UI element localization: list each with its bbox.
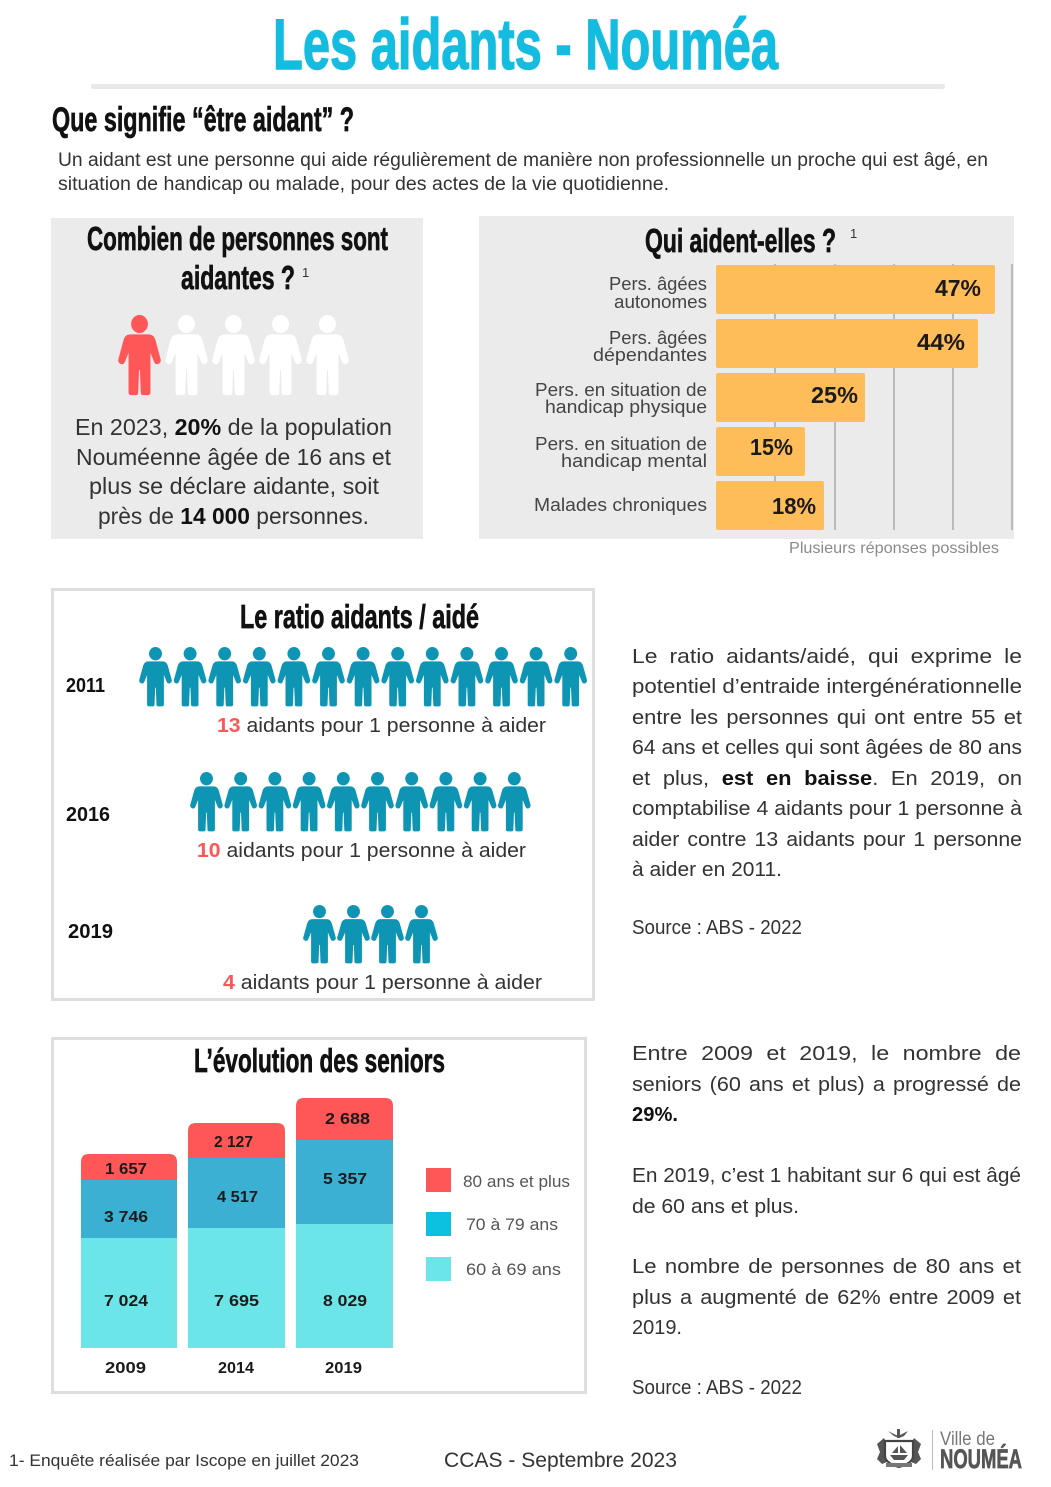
text block: definition: situation de handicap ou malade, pour des actes de la vie quotidienne. [58, 174, 669, 195]
logo: ville de Nouméa [877, 1429, 1022, 1474]
text block: ratio explanation: et plus, est en baisse . En 2019, on [632, 768, 1022, 790]
panel: qui aident-elles [479, 216, 1014, 539]
text block: seniors explanation: Le nombre de personnes de 80 ans et [632, 1256, 1021, 1278]
bar chart: who is helped: dépendantes [593, 345, 707, 365]
heading: qui aident-elles: Qui aident-elles ? [645, 222, 836, 259]
footnote: 1- Enquête réalisée par Iscope en juillet 2023 [9, 1452, 359, 1470]
text block: 20% de la population: près de 14 000 personnes. [98, 503, 369, 529]
text block: ratio explanation: aider contre 13 aidants pour 1 personne [632, 829, 1022, 851]
bar chart: who is helped: Pers. âgées [609, 274, 707, 294]
icon: crest [877, 1429, 921, 1467]
stacked bar: 2019: 2 688 [325, 1111, 370, 1128]
text block: seniors explanation: plus a augmenté de 62% entre 2009 et [632, 1287, 1021, 1309]
bar chart: who is helped: Malades chroniques [534, 495, 707, 515]
stacked bar: 2014 [188, 1123, 285, 1377]
title: Les aidants - Nouméa [273, 6, 778, 85]
text block: ratio explanation: à aider en 2011. [632, 859, 782, 881]
bar chart: who is helped: handicap physique [545, 397, 707, 417]
stacked bar: 2009 [81, 1154, 177, 1377]
stacked bar: 2009: 2009 [105, 1360, 146, 1377]
heading: combien de personnes [87, 220, 388, 296]
logo: ville de Nouméa: Ville de [940, 1429, 995, 1450]
row: 2011: 2011 [66, 675, 105, 697]
stacked bar: 2014: 2 127 [214, 1134, 253, 1151]
stacked bar: 2019: 8 029 [323, 1293, 367, 1310]
bar chart: who is helped: 47% [935, 275, 981, 301]
footer credit: CCAS - Septembre 2023 [444, 1449, 677, 1472]
stacked bar: 2014: 4 517 [217, 1189, 258, 1206]
row: 2019: 2019 [68, 921, 113, 943]
heading: combien de personnes: aidantes ? [181, 259, 295, 296]
row: 2019 [68, 905, 542, 994]
icon row: one in five people [118, 315, 349, 395]
stacked bar: 2019 [296, 1098, 393, 1377]
heading: évolution: L’évolution des seniors [194, 1042, 445, 1079]
text block: seniors explanation: 2019. [632, 1317, 682, 1339]
stacked bar: 2019: 2019 [325, 1360, 362, 1377]
text block: seniors explanation [632, 1043, 1021, 1399]
note: plusieurs réponses: Plusieurs réponses possibles [789, 540, 999, 557]
text block: definition [58, 150, 988, 195]
bar chart: who is helped: Pers. âgées [609, 328, 707, 348]
heading: combien de personnes: Combien de personnes sont [87, 220, 388, 257]
row: 2016: 10 aidants pour 1 personne à aider [197, 840, 526, 862]
bar chart: who is helped: 15% [750, 434, 793, 460]
stacked bar: 2009: 3 746 [104, 1209, 148, 1226]
row: 2011 [66, 647, 587, 737]
text block: ratio explanation: comptabilise 4 aidants pour 1 personne à [632, 798, 1023, 820]
bar chart: who is helped [534, 265, 995, 530]
text block: 20% de la population: Nouméenne âgée de 16 ans et [76, 444, 392, 470]
legend: 60 à 69 ans [466, 1260, 561, 1279]
text block: seniors explanation: de 60 ans et plus. [632, 1196, 799, 1218]
text block: seniors explanation: 29%. [632, 1104, 678, 1126]
text block: definition: Un aidant est une personne qui aide régulièrement de manière non professionnelle un proche qui est âgé, en [58, 150, 988, 171]
text block: ratio explanation [632, 646, 1023, 939]
row: 2019: 4 aidants pour 1 personne à aider [223, 972, 542, 994]
heading: ratio: Le ratio aidants / aidé [240, 598, 479, 635]
legend: 80 ans et plus [463, 1172, 570, 1191]
text block: ratio explanation: Le ratio aidants/aidé, qui exprime le [632, 646, 1022, 668]
row: 2016: 2016 [66, 804, 110, 826]
bar chart: who is helped: handicap mental [561, 451, 707, 471]
text block: seniors explanation: Source : ABS - 2022 [632, 1377, 802, 1399]
row: 2011: 13 aidants pour 1 personne à aider [217, 715, 546, 737]
heading: qui aident-elles: 1 [850, 226, 857, 241]
heading: combien de personnes: 1 [302, 265, 309, 280]
bar chart: who is helped: autonomes [614, 292, 707, 312]
text block: ratio explanation: 64 ans et celles qui sont âgées de 80 ans [632, 737, 1022, 759]
legend [426, 1168, 570, 1281]
bar chart: who is helped: 44% [917, 329, 965, 355]
legend: 70 à 79 ans [466, 1215, 558, 1234]
text block: seniors explanation: En 2019, c’est 1 habitant sur 6 qui est âgé [632, 1165, 1021, 1187]
panel: évolution des seniors [52, 1038, 586, 1392]
bar chart: who is helped: 25% [811, 382, 858, 408]
text block: seniors explanation: Entre 2009 et 2019, le nombre de [632, 1043, 1021, 1065]
bar chart: who is helped: Pers. en situation de [535, 434, 707, 454]
stacked bar: 2009: 1 657 [105, 1161, 147, 1178]
text block: seniors explanation: seniors (60 ans et plus) a progressé de [632, 1074, 1021, 1096]
heading: definition: Que signifie “être aidant” ? [52, 101, 354, 139]
row: 2016 [66, 772, 531, 862]
stacked bar: 2009: 7 024 [104, 1293, 148, 1310]
panel: ratio aidants / aidé [52, 590, 594, 1000]
text block: ratio explanation: entre les personnes qui ont entre 55 et [632, 707, 1022, 729]
stacked bar: 2019: 5 357 [323, 1171, 367, 1188]
bar chart: who is helped: Pers. en situation de [535, 380, 707, 400]
stacked bar: 2014: 7 695 [214, 1293, 259, 1310]
stacked bar: 2014: 2014 [218, 1360, 254, 1377]
text block: 20% de la population [75, 414, 392, 529]
bar chart: who is helped: 18% [772, 493, 816, 519]
text block: 20% de la population: En 2023, 20% de la population [75, 414, 392, 440]
text block: ratio explanation: potentiel d’entraide intergénérationnelle [632, 676, 1022, 698]
panel: combien de personnes [51, 218, 423, 539]
text block: 20% de la population: plus se déclare aidante, soit [89, 473, 380, 499]
text block: ratio explanation: Source : ABS - 2022 [632, 917, 802, 939]
